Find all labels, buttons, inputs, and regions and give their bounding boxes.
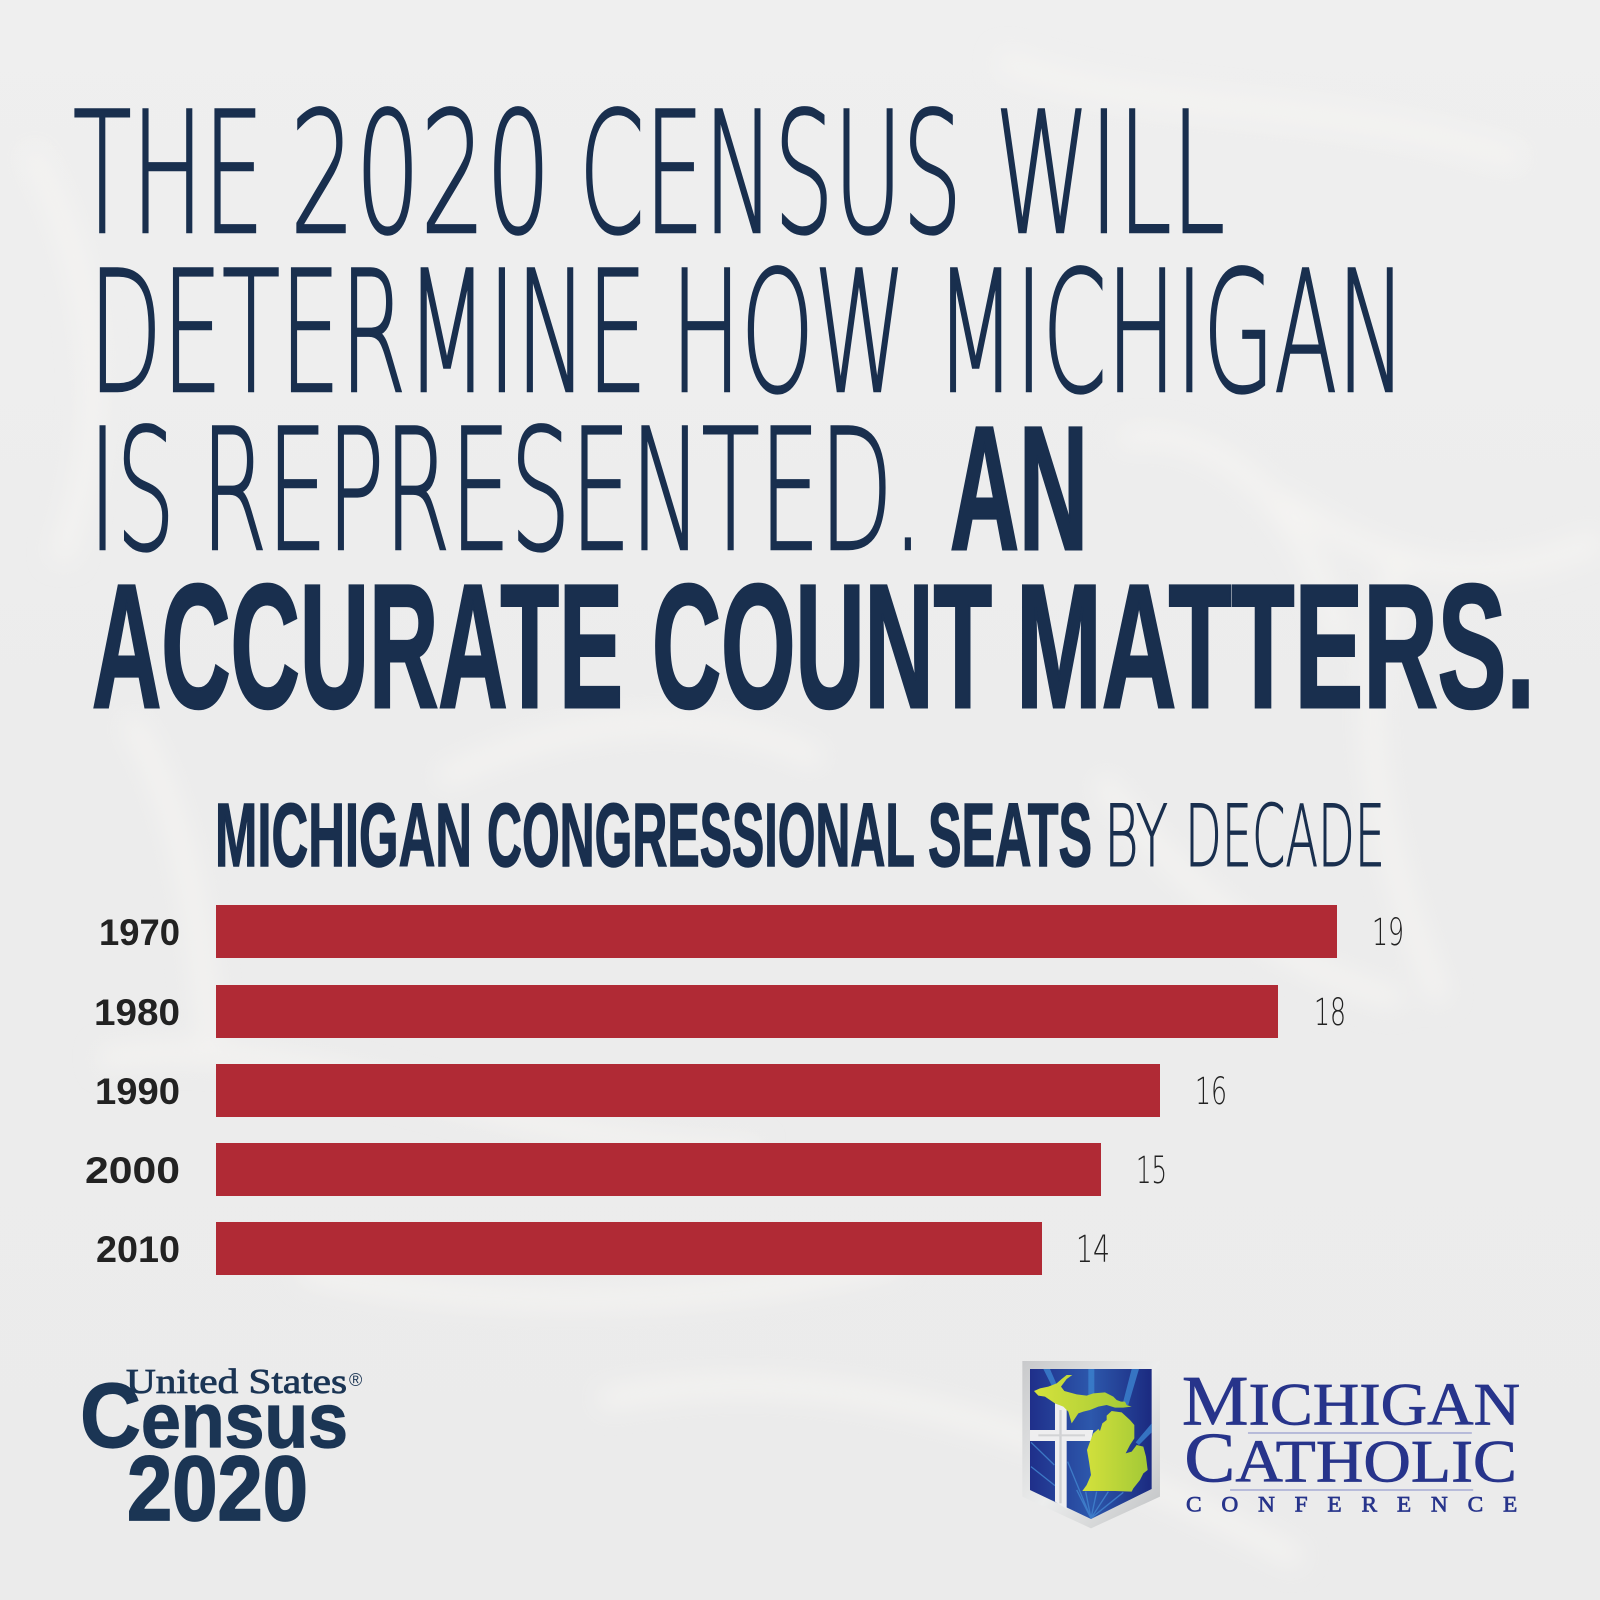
title: THE (73, 76, 264, 272)
title (73, 76, 1535, 745)
bar: 1970: 19 (1372, 911, 1404, 954)
title: WILL (995, 76, 1225, 272)
logo: Michigan Catholic Conference (1022, 1361, 1520, 1528)
icon: shield with Michigan map and cross (1022, 1361, 1160, 1528)
bar: 1980 (94, 985, 1346, 1038)
chart heading: CONGRESSIONAL (487, 786, 915, 886)
bar: 1990: 1990 (95, 1071, 180, 1112)
bar: 1980: 18 (1314, 991, 1346, 1034)
bar: 2010 (96, 1222, 1110, 1275)
bar: 2010: 2010 (96, 1229, 180, 1270)
title: 2020 (290, 76, 551, 272)
logo: United States Census 2020 (80, 1362, 362, 1540)
logo: United States Census 2020: United States (126, 1362, 347, 1401)
chart heading (215, 786, 1385, 887)
title: HOW (671, 235, 906, 431)
wordmark: CATHOLIC (1184, 1419, 1517, 1497)
bar: 1970: 1970 (99, 912, 180, 953)
bar chart (85, 905, 1404, 1275)
logo: United States Census 2020: ® (349, 1370, 362, 1390)
bar: 1970 (99, 905, 1404, 958)
bar: 2010: 14 (1076, 1228, 1110, 1271)
bar: 2000: 2000 (85, 1150, 180, 1191)
wordmark (1182, 1361, 1520, 1516)
logo: United States Census 2020: Census (80, 1365, 348, 1467)
chart heading: DECADE (1185, 787, 1385, 887)
title: IS (89, 393, 175, 589)
title: COUNT (652, 549, 992, 745)
title: ACCURATE (92, 549, 623, 745)
logo: United States Census 2020: 2020 (127, 1438, 308, 1540)
chart heading: SEATS (928, 786, 1092, 886)
title: CENSUS (579, 76, 962, 272)
bar: 1980: 1980 (94, 992, 180, 1033)
bar: 2000: 15 (1136, 1149, 1167, 1192)
wordmark: MICHIGAN (1182, 1361, 1520, 1440)
title: DETERMINE (89, 235, 647, 431)
bar: 2000 (85, 1143, 1167, 1196)
chart heading: BY (1104, 787, 1168, 887)
bar: 1990 (95, 1064, 1227, 1117)
chart heading: MICHIGAN (215, 786, 472, 886)
title: REPRESENTED. (201, 393, 923, 589)
wordmark: CONFERENCE (1186, 1491, 1517, 1516)
bar: 1990: 16 (1195, 1070, 1227, 1113)
title: AN (950, 391, 1088, 587)
